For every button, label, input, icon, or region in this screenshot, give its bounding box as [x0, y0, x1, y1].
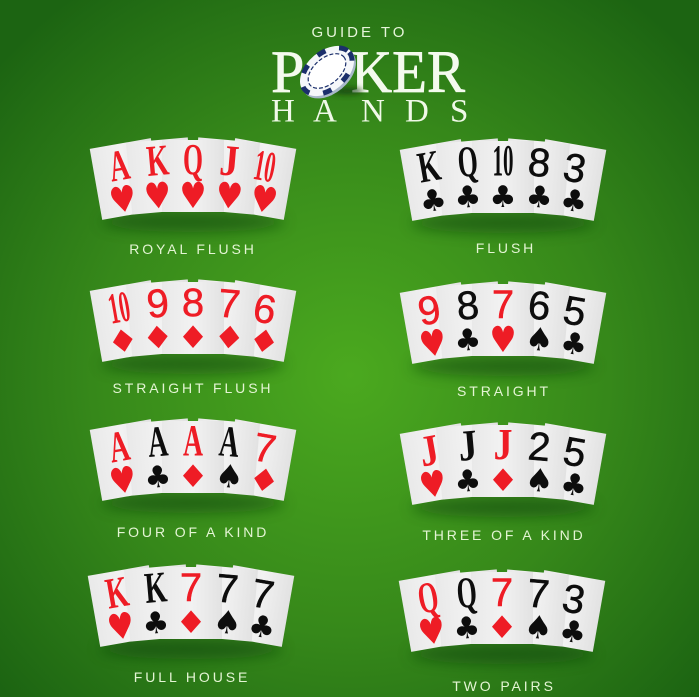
card: Q hearts: Q — [183, 135, 203, 184]
card: 7 diamonds — [245, 425, 289, 502]
label: full house: FULL HOUSE — [134, 669, 250, 685]
card: A diamonds: A — [183, 416, 203, 465]
card: K hearts: K — [102, 567, 132, 619]
card: 7 hearts: ♥ — [490, 320, 516, 361]
card: 7 clubs — [243, 571, 285, 647]
card: 6 diamonds: 6 — [250, 286, 279, 333]
card: 5 clubs — [555, 288, 597, 364]
card: A hearts: ♥ — [106, 178, 140, 223]
card: K clubs — [410, 140, 449, 221]
card: 8 clubs: ♣ — [453, 322, 483, 359]
card: A hearts: A — [105, 140, 133, 191]
card: A clubs: ♣ — [143, 459, 173, 496]
card: 10 clubs — [490, 136, 516, 215]
card: 7 hearts: 7 — [492, 283, 514, 327]
card: K hearts — [98, 566, 138, 650]
card: A hearts: A — [105, 421, 133, 472]
icon: chip shadow — [331, 88, 363, 94]
card: A diamonds — [177, 416, 209, 495]
heading: hands: HANDS — [271, 94, 468, 130]
card: J clubs: J — [456, 420, 479, 471]
card: J hearts: J — [218, 135, 241, 186]
card: 7 diamonds: 7 — [180, 566, 202, 610]
card: Q hearts: ♥ — [415, 610, 449, 655]
card backs — [88, 564, 294, 647]
card: 8 diamonds: ♦ — [177, 320, 209, 356]
card: 6 diamonds — [245, 286, 289, 363]
card: 7 diamonds: ♦ — [486, 610, 518, 646]
card: 7 diamonds: 7 — [491, 571, 513, 615]
card: K clubs: K — [414, 141, 444, 193]
card: 7 diamonds: ♦ — [212, 319, 247, 358]
label: two pairs: TWO PAIRS — [452, 678, 556, 694]
card: 3 clubs: ♣ — [558, 182, 590, 221]
card backs — [90, 137, 296, 220]
card: 3 clubs: ♣ — [557, 613, 589, 652]
hand: straight flush — [90, 279, 296, 374]
card: 8 clubs: 8 — [526, 140, 552, 186]
card: 10 clubs: 10 — [492, 136, 514, 185]
card: 10 hearts: 10 — [250, 140, 279, 192]
card: K hearts — [139, 135, 174, 218]
card: 7 diamonds — [486, 571, 518, 646]
card: 7 diamonds: 7 — [216, 281, 242, 327]
card: J hearts: J — [415, 425, 443, 476]
card: J hearts — [410, 424, 450, 508]
card: J diamonds: ♦ — [487, 463, 519, 499]
card: 10 diamonds: 10 — [104, 282, 134, 334]
card backs — [90, 279, 296, 362]
card: 7 spades: ♠ — [522, 607, 554, 648]
card: J hearts — [214, 135, 248, 218]
card: 10 diamonds: ♦ — [104, 321, 142, 362]
card: 8 diamonds: 8 — [182, 281, 204, 325]
card: 9 diamonds — [137, 281, 175, 358]
card: A clubs — [139, 416, 173, 496]
card: J hearts: ♥ — [214, 175, 244, 218]
card: 7 spades: 7 — [525, 571, 551, 617]
card: 7 diamonds: 7 — [250, 425, 279, 472]
card: 2 spades: ♠ — [523, 460, 555, 501]
card: 7 clubs: 7 — [248, 571, 277, 618]
title — [271, 24, 468, 130]
card backs — [400, 422, 606, 505]
hand: three of a kind — [400, 420, 606, 517]
card: J hearts: ♥ — [416, 463, 450, 508]
card: K hearts: K — [145, 135, 171, 186]
card: 3 clubs — [554, 576, 596, 652]
card: Q clubs: ♣ — [453, 179, 483, 216]
card: 3 clubs: 3 — [559, 576, 588, 623]
card: 7 spades: ♠ — [211, 602, 243, 643]
card: 6 spades — [523, 283, 558, 360]
card: Q clubs — [449, 136, 483, 216]
hand: straight — [400, 281, 606, 376]
card: 8 clubs — [524, 140, 558, 216]
card: 10 hearts — [245, 140, 287, 223]
card: 3 clubs — [555, 145, 597, 221]
card: 7 spades: 7 — [214, 566, 240, 612]
card: 7 diamonds: ♦ — [175, 605, 207, 641]
label: straight: STRAIGHT — [457, 383, 551, 399]
card: Q hearts: Q — [414, 572, 442, 623]
card: J diamonds: J — [494, 420, 512, 469]
label: four of a kind: FOUR OF A KIND — [117, 524, 269, 540]
heading: poker P: P — [271, 39, 304, 105]
card: 9 hearts — [410, 287, 450, 367]
hand: royal flush — [90, 135, 296, 232]
card: 8 diamonds — [177, 281, 209, 356]
hand: two pairs — [399, 567, 605, 664]
card: 9 hearts: ♥ — [416, 322, 450, 367]
card: A spades: A — [217, 416, 242, 467]
card: 10 hearts: ♥ — [247, 178, 281, 223]
card: K hearts: ♥ — [104, 605, 138, 650]
hand: full house — [88, 562, 294, 659]
card: 7 spades — [211, 566, 246, 643]
label: straight flush: STRAIGHT FLUSH — [113, 380, 273, 396]
card: Q clubs: Q — [456, 136, 480, 187]
card: 7 hearts — [490, 283, 516, 361]
label: royal flush: ROYAL FLUSH — [129, 241, 257, 257]
card: 6 spades: ♠ — [523, 319, 555, 360]
card: 5 clubs: ♣ — [558, 466, 590, 505]
hand: flush — [400, 136, 606, 233]
card: K clubs: ♣ — [417, 182, 449, 221]
card: Q clubs: ♣ — [452, 610, 482, 647]
card: Q clubs: Q — [455, 567, 479, 618]
card: 9 diamonds: ♦ — [140, 319, 175, 358]
card: 9 diamonds: 9 — [145, 281, 171, 327]
heading: poker KER: KER — [351, 39, 465, 105]
card: Q hearts — [409, 571, 449, 655]
card: A hearts — [100, 139, 140, 223]
card backs — [400, 138, 606, 221]
card: 7 diamonds — [175, 566, 207, 641]
card: Q hearts — [180, 135, 206, 217]
icon: poker chip — [290, 36, 366, 109]
label: flush: FLUSH — [476, 240, 536, 256]
card: 9 hearts: 9 — [415, 287, 444, 335]
card: A spades: ♠ — [213, 456, 245, 497]
card: 8 clubs — [449, 283, 483, 359]
card: 7 diamonds — [212, 281, 250, 358]
card: 2 spades: 2 — [526, 424, 552, 470]
card: 6 diamonds: ♦ — [245, 322, 283, 363]
card: 6 spades: 6 — [526, 283, 552, 329]
card: 5 clubs — [555, 429, 597, 505]
card backs — [400, 281, 606, 364]
card: 3 clubs: 3 — [560, 145, 589, 192]
card: J clubs — [449, 420, 483, 500]
card: 7 spades — [522, 571, 557, 648]
card: 5 clubs: 5 — [560, 429, 589, 476]
card: 7 diamonds: ♦ — [245, 461, 283, 502]
card backs — [399, 569, 605, 652]
card: 8 clubs: 8 — [455, 283, 481, 329]
card: 5 clubs: ♣ — [558, 325, 590, 364]
card: 10 diamonds — [97, 281, 142, 362]
card: K clubs — [137, 562, 171, 642]
card: 7 clubs: ♣ — [246, 608, 278, 647]
card: J clubs: ♣ — [453, 463, 483, 500]
label: three of a kind: THREE OF A KIND — [422, 527, 586, 543]
card: 2 spades — [523, 424, 558, 501]
card: 8 clubs: ♣ — [524, 179, 554, 216]
card: K hearts: ♥ — [143, 175, 173, 218]
card: A hearts: ♥ — [106, 459, 140, 504]
card: K clubs: ♣ — [141, 605, 171, 642]
card: A spades — [213, 416, 249, 497]
card: 5 clubs: 5 — [560, 288, 589, 335]
hand: four of a kind — [90, 416, 296, 513]
card: Q clubs — [448, 567, 482, 647]
card: A clubs: A — [146, 416, 170, 467]
card: A diamonds: ♦ — [177, 459, 209, 495]
card: 10 clubs: ♣ — [490, 180, 516, 215]
card: K clubs: K — [143, 562, 169, 613]
card: J diamonds — [487, 420, 519, 499]
card: Q hearts: ♥ — [180, 176, 206, 217]
heading: guide to: GUIDE TO — [312, 24, 407, 41]
card: A hearts — [100, 420, 140, 504]
card backs — [90, 418, 296, 501]
